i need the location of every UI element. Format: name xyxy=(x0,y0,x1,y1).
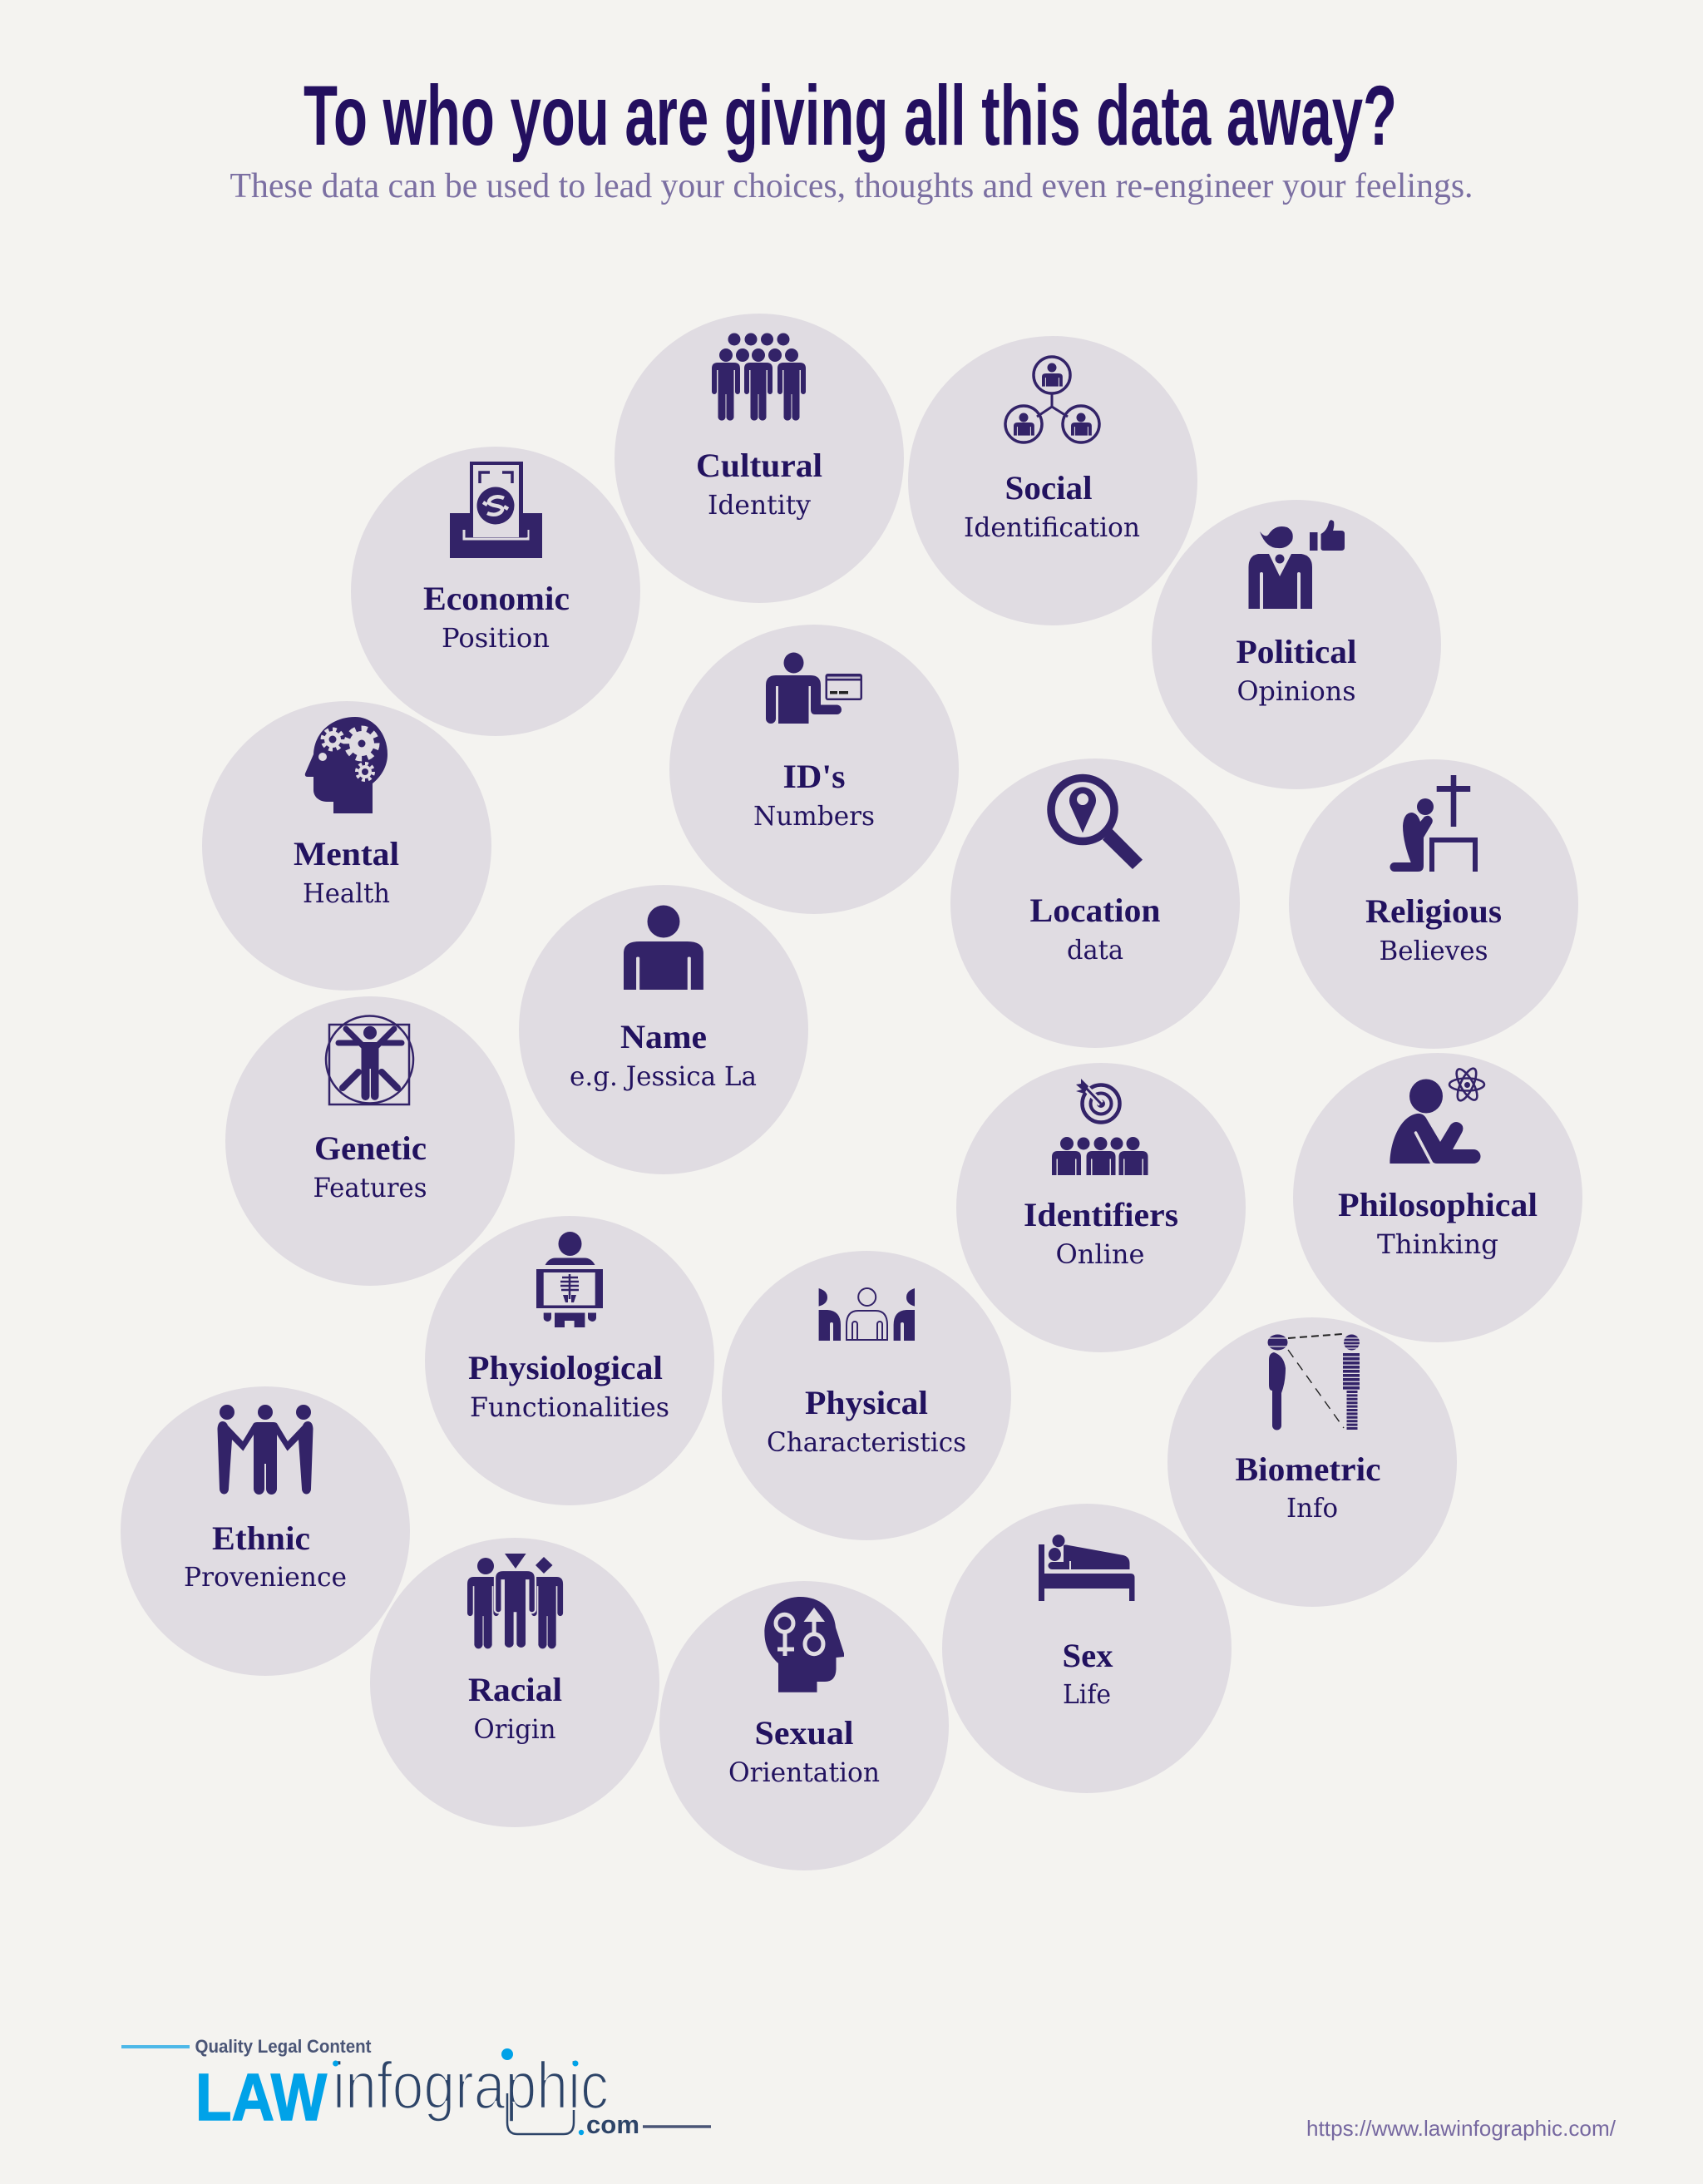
heading: Political xyxy=(1236,633,1357,670)
circle xyxy=(908,336,1197,625)
label: e.g. Jessica La xyxy=(570,1060,757,1092)
icon: money slot xyxy=(450,462,542,558)
panel: economic position xyxy=(351,447,640,736)
label: Characteristics xyxy=(767,1426,966,1458)
heading: Biometric xyxy=(1236,1450,1380,1488)
circle xyxy=(225,996,515,1286)
circle xyxy=(615,314,904,603)
logo law word: LAW xyxy=(195,2060,327,2134)
panel: racial origin xyxy=(370,1538,659,1827)
heading: Religious xyxy=(1365,892,1502,930)
label: Numbers xyxy=(753,800,875,832)
subtitle: These data can be used to lead your choices, thoughts and even re-engineer your feelings. xyxy=(230,167,1473,205)
circle xyxy=(425,1216,714,1505)
label: Position xyxy=(442,622,550,654)
label: Functionalities xyxy=(470,1391,669,1423)
icon: head with gender symbols xyxy=(764,1597,844,1692)
icon: three men with shapes xyxy=(467,1554,563,1648)
panel: philosophical thinking xyxy=(1293,1053,1582,1342)
icon: body scan xyxy=(1267,1334,1361,1430)
heading: Economic xyxy=(423,580,570,617)
panel: physiological functionalities xyxy=(425,1216,714,1505)
circle xyxy=(519,885,808,1174)
panel: sex life xyxy=(942,1504,1232,1793)
label: Orientation xyxy=(728,1757,880,1788)
circle xyxy=(1289,759,1578,1049)
heading: Cultural xyxy=(696,447,822,484)
panel: social identification xyxy=(908,336,1197,625)
icon: magnifier with pin xyxy=(1051,778,1143,869)
circle xyxy=(202,701,491,991)
icon: politician with thumbs up xyxy=(1249,520,1345,609)
panel: genetic features xyxy=(225,996,515,1286)
icon: person xyxy=(624,905,703,990)
icon: x-ray xyxy=(536,1232,603,1327)
label: Thinking xyxy=(1377,1228,1498,1260)
icon: vitruvian man xyxy=(326,1016,413,1104)
icon: thinker with atom xyxy=(1390,1066,1484,1164)
logo: lawinfographic xyxy=(121,2036,711,2139)
label: Life xyxy=(1063,1678,1111,1710)
icon: target and team xyxy=(1052,1079,1148,1175)
heading: Name xyxy=(620,1018,707,1055)
icon: head with gears xyxy=(305,717,387,813)
icon: three figures xyxy=(819,1288,915,1341)
panel: cultural identity xyxy=(615,314,904,603)
heading: Racial xyxy=(468,1671,562,1708)
panel: identifiers online xyxy=(956,1063,1246,1352)
logo tagline: Quality Legal Content xyxy=(195,2036,372,2057)
icon: network xyxy=(1005,357,1099,442)
circle xyxy=(1152,500,1441,789)
label: Origin xyxy=(474,1713,555,1745)
logo infographic word: infographic xyxy=(333,2048,609,2122)
label: Info xyxy=(1286,1492,1338,1524)
circle xyxy=(1293,1053,1582,1342)
label: Health xyxy=(303,877,390,909)
panel: mental health xyxy=(202,701,491,991)
label: Opinions xyxy=(1237,675,1355,707)
circle xyxy=(722,1251,1011,1540)
heading: Mental xyxy=(294,835,399,872)
heading: Physical xyxy=(805,1384,928,1421)
panel: physical characteristics xyxy=(722,1251,1011,1540)
panel: ethnic provenience xyxy=(121,1386,410,1676)
label: Believes xyxy=(1379,935,1488,966)
heading: Location xyxy=(1029,892,1161,929)
circle xyxy=(121,1386,410,1676)
icon: bed xyxy=(1039,1534,1134,1601)
circle xyxy=(370,1538,659,1827)
circle xyxy=(950,758,1240,1048)
icon: person with card xyxy=(766,652,862,724)
panel: sexual orientation xyxy=(659,1581,949,1870)
heading: Philosophical xyxy=(1338,1186,1538,1223)
circle xyxy=(351,447,640,736)
source url: https://www.lawinfographic.com/ xyxy=(1306,2116,1617,2141)
heading: ID's xyxy=(783,758,845,795)
icon: praying figure xyxy=(1390,775,1478,872)
logo dotcom: com xyxy=(586,2110,639,2139)
heading: Sexual xyxy=(755,1714,853,1752)
circle xyxy=(942,1504,1232,1793)
circle xyxy=(669,625,959,914)
label: Identification xyxy=(964,511,1140,543)
label: Identity xyxy=(708,489,811,521)
panel: biometric info xyxy=(1167,1317,1457,1607)
label: data xyxy=(1067,934,1123,966)
heading: Identifiers xyxy=(1024,1196,1178,1233)
panel: name xyxy=(519,885,808,1174)
circle xyxy=(956,1063,1246,1352)
circle xyxy=(1167,1317,1457,1607)
icon: three people holding hands xyxy=(218,1405,313,1495)
label: Online xyxy=(1056,1238,1144,1270)
label: Features xyxy=(313,1172,427,1203)
panel: location data xyxy=(950,758,1240,1048)
heading: Sex xyxy=(1063,1637,1113,1674)
label: Provenience xyxy=(184,1561,347,1593)
heading: Social xyxy=(1005,469,1093,506)
circle xyxy=(659,1581,949,1870)
heading: Ethnic xyxy=(212,1519,310,1557)
heading: Physiological xyxy=(468,1349,663,1386)
panel: religious believes xyxy=(1289,759,1578,1049)
heading: Genetic xyxy=(314,1129,427,1167)
icon: crowd xyxy=(712,333,806,421)
panel: political opinions xyxy=(1152,500,1441,789)
panel: ids numbers xyxy=(669,625,959,914)
